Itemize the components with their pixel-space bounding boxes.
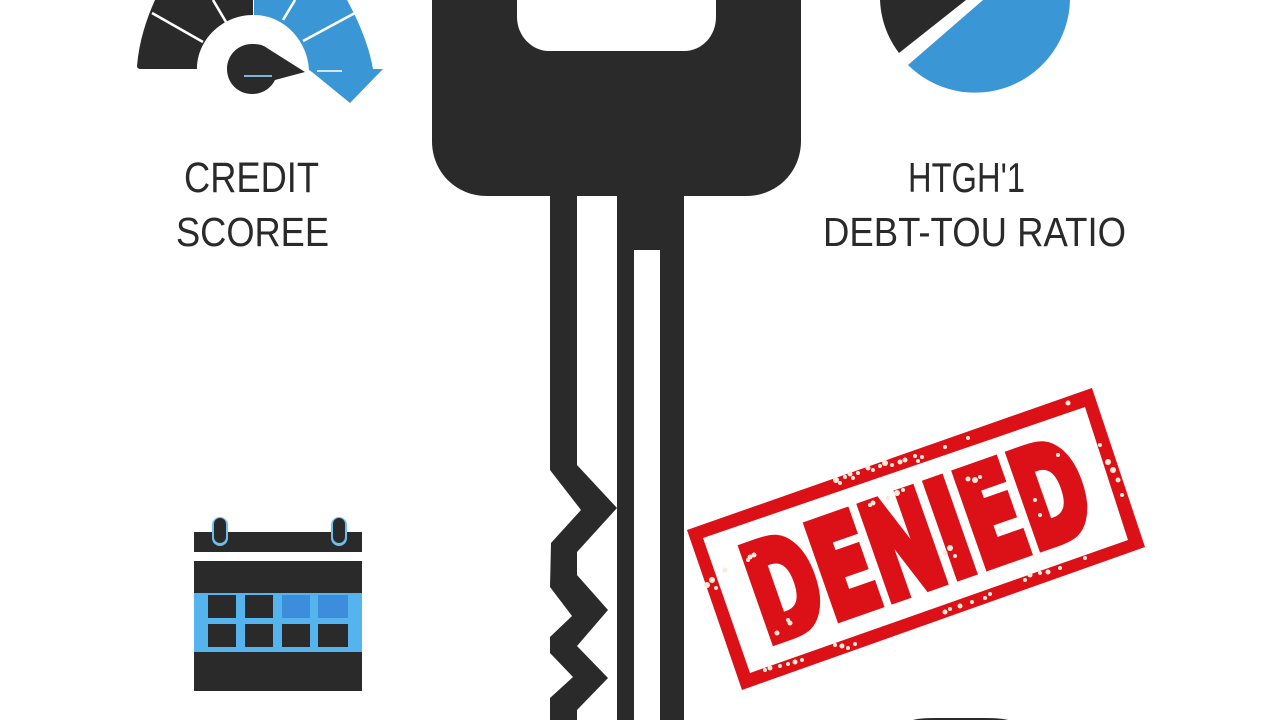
icon: credit score gauge [137, 0, 383, 103]
label: credit score: CREDIT [184, 154, 319, 202]
key blade: toothed left bar [550, 190, 617, 720]
key blade: right channel [617, 190, 684, 720]
calendar date band [194, 593, 362, 652]
label: credit score: SCOREE [176, 209, 329, 255]
key head [432, 0, 801, 196]
stamp: denied [687, 388, 1145, 690]
calendar body [194, 561, 362, 691]
stamp word: DENIED [727, 411, 1110, 674]
stamp wear marks [704, 400, 1124, 672]
stamp border [687, 388, 1145, 690]
label: credit score [176, 154, 329, 255]
icon: debt ratio pie chart [880, 0, 1070, 93]
icon: calendar [194, 517, 362, 691]
icon: partially visible device top [913, 718, 1008, 720]
calendar date cells [208, 595, 348, 647]
label: high debt-to ratio: HTGH'1 [908, 154, 1025, 201]
label: high debt-to ratio: DEBT-TOU RATIO [823, 209, 1126, 255]
calendar header [194, 532, 362, 552]
icon: key [432, 0, 801, 720]
label: high debt-to ratio [823, 154, 1126, 255]
calendar rings [212, 517, 347, 546]
